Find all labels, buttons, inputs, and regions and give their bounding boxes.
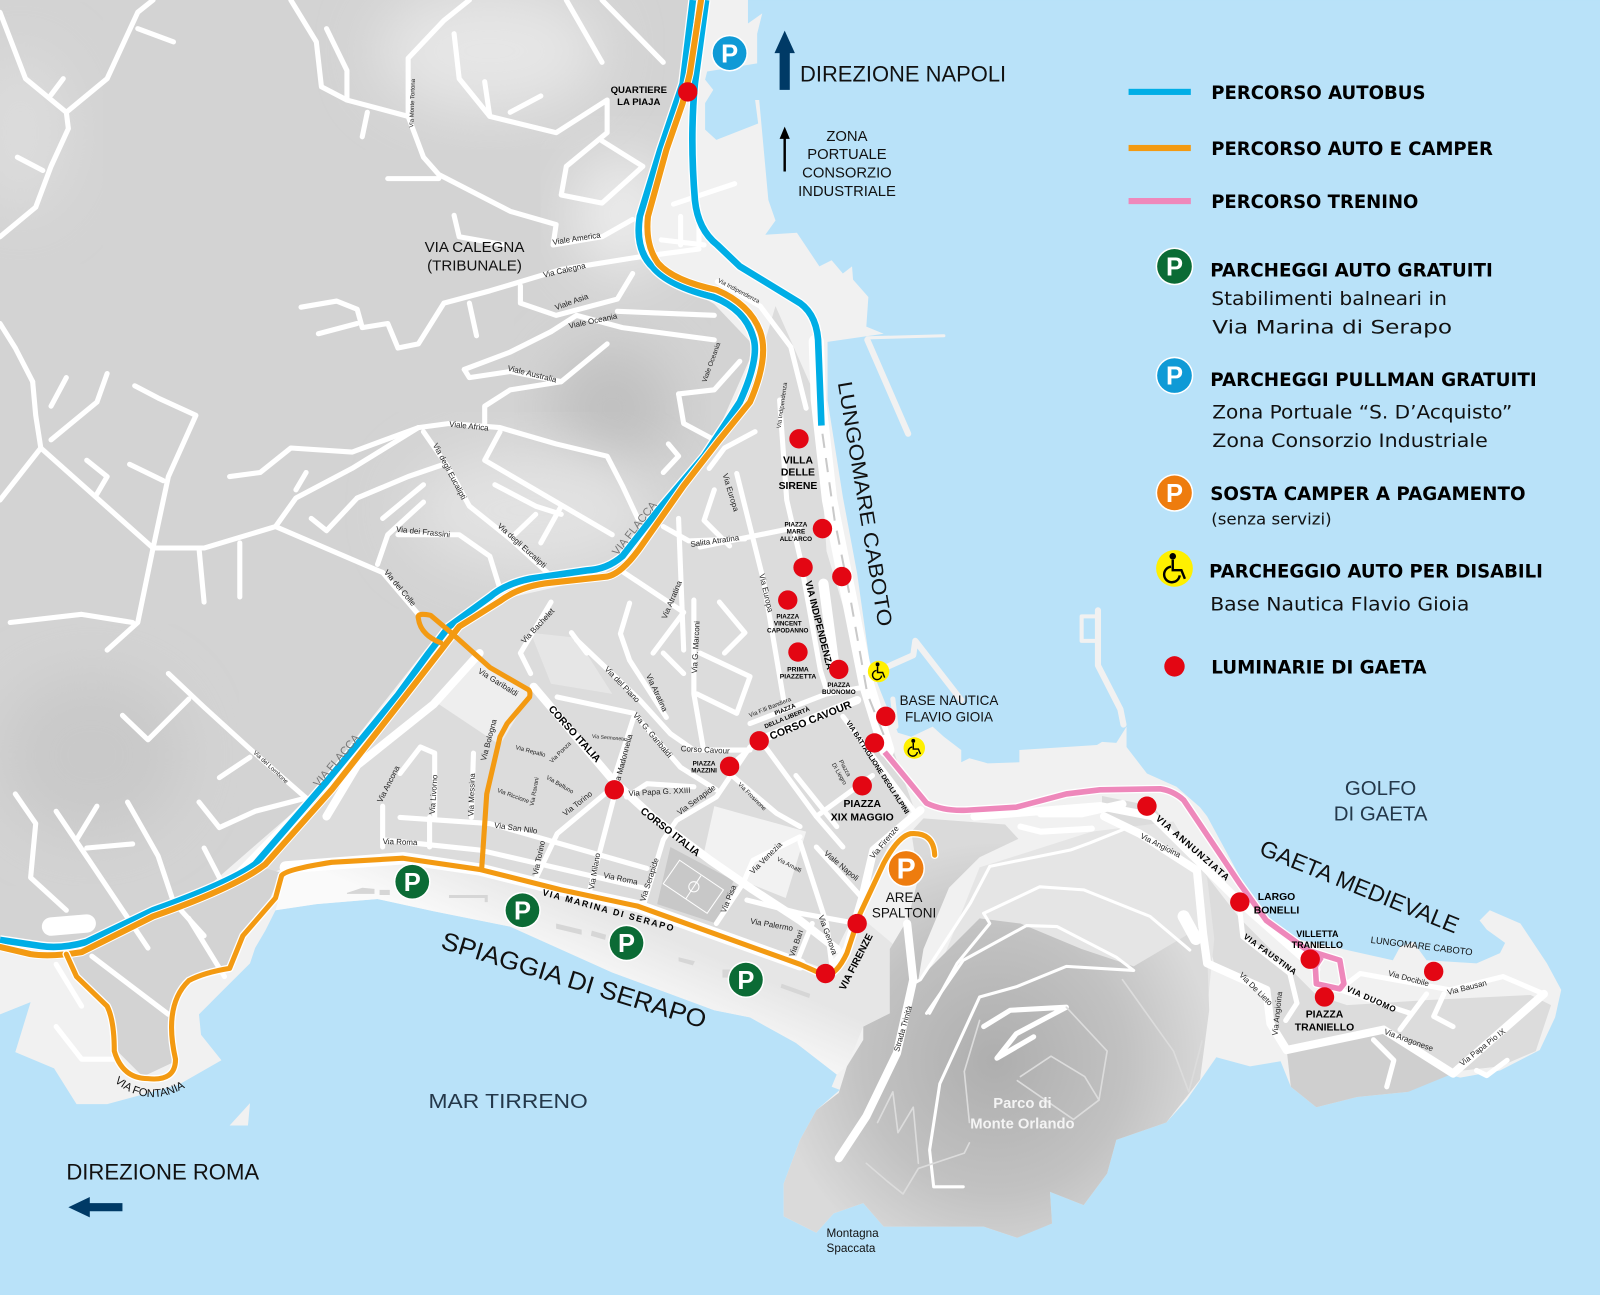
bold place labels: DELLE (781, 468, 815, 479)
medieval quarter blocks (1102, 796, 1551, 1071)
route: auto e camper (0, 0, 935, 1079)
legend: parcheggi auto gratuiti (1156, 248, 1493, 339)
bold place labels: BUONOMO (822, 689, 856, 696)
street name labels: Via Messina (466, 772, 477, 816)
bold place labels: VIA FIRENZE (838, 932, 876, 992)
street name labels: Via Sermoneta (592, 734, 626, 743)
bold place labels: BONELLI (1254, 905, 1299, 916)
street name labels: Viale Oceania (701, 342, 722, 383)
street name labels: Via Madonnella (612, 733, 635, 788)
marker: disabled parking 2 (904, 737, 925, 759)
street name labels: Via Repallo (515, 745, 547, 759)
bold place labels: VIA DUOMO (1345, 984, 1398, 1014)
markers: free car parking (394, 863, 764, 998)
street name labels: Via del Colle (382, 568, 418, 608)
street name labels: Via Bologna (479, 718, 499, 762)
street name labels: Via Livorno (428, 774, 439, 814)
bold place labels: VIA INDIPENDENZA (802, 580, 835, 671)
label: direzione Roma: DIREZIONE ROMA (66, 1160, 259, 1185)
label: golfo di Gaeta (1334, 778, 1428, 825)
direction arrow: Napoli (774, 31, 795, 90)
bold place labels: PIAZZETTA (780, 674, 816, 681)
label: zona portuale: ZONA (826, 129, 868, 145)
arrow: zona portuale (780, 127, 790, 171)
legend: parcheggi pullman gratuiti: Zona Portuale “S. D’Acquisto” (1212, 402, 1512, 423)
street name labels: Via del Piano (603, 665, 642, 705)
legend: parcheggi pullman gratuiti: Zona Consorzio Industriale (1212, 431, 1488, 452)
street name labels: Salita Atratina (690, 533, 740, 549)
legend: parcheggio disabili: PARCHEGGIO AUTO PER DISABILI (1209, 562, 1543, 583)
bold place labels: LARGO (1258, 892, 1295, 903)
label: base nautica: BASE NAUTICA (900, 693, 998, 708)
street name labels: Corso Cavour (681, 744, 730, 756)
label: zona portuale: PORTUALE (807, 147, 887, 163)
markers: free car parking: P (514, 897, 531, 925)
marker: bus parking: P (721, 40, 738, 68)
hill shading: northern hills (0, 0, 755, 944)
bold place labels: CORSO CAVOUR (768, 699, 854, 743)
legend: parcheggi pullman gratuiti (1156, 357, 1537, 452)
street name labels: Via San Nilo (494, 821, 539, 836)
street name labels: Via G. Marconi (690, 621, 702, 674)
street name labels: Via G. Garibaldi (631, 711, 674, 760)
bold place labels: VIA BATTAGLIONE DEGLI ALPINI (844, 720, 910, 816)
bold place labels: CORSO ITALIA (546, 704, 603, 765)
bold place labels: TRANIELLO (1295, 1023, 1354, 1034)
bold place labels: VILLETTA (1296, 929, 1339, 939)
legend: percorso autobus: PERCORSO AUTOBUS (1211, 83, 1426, 104)
label: Montagna Spaccata: Spaccata (827, 1242, 876, 1255)
hill shading highlights (0, 0, 673, 837)
bold place labels: VIA ANNUNZIATA (1154, 813, 1231, 883)
street name labels: Viale America (552, 230, 602, 247)
label: lungomare Caboto: LUNGOMARE CABOTO (833, 380, 895, 628)
route: trenino (885, 752, 1344, 989)
street name labels: Via Atratina (644, 673, 670, 714)
bold place labels: XIX MAGGIO (831, 812, 894, 823)
street name labels: Via Roma (603, 871, 639, 887)
legend: parcheggi pullman gratuiti: PARCHEGGI PULLMAN GRATUITI (1210, 370, 1537, 391)
bold place labels: QUARTIERE (611, 85, 668, 96)
label: direzione Napoli: DIREZIONE NAPOLI (800, 62, 1006, 87)
street name labels: Via Papa G. XXIII (628, 786, 691, 798)
legend: parcheggi pullman gratuiti: P (1166, 363, 1183, 391)
lungomare dashes (822, 434, 886, 740)
street name labels: VIA FLACCA (311, 732, 363, 790)
label: area Spaltoni: AREA (886, 890, 922, 905)
street name labels: Via Europa (721, 472, 741, 513)
street name labels: LUNGOMARE CABOTO (1370, 935, 1473, 957)
street name labels: Via Torino (561, 789, 595, 818)
beach establishments (347, 888, 810, 998)
label: parco di Monte Orlando: Monte Orlando (970, 1117, 1075, 1133)
bold place labels: VILLA (783, 455, 813, 466)
street name labels: Via Docibile (1387, 969, 1430, 988)
bold place labels: PIAZZA (843, 799, 881, 810)
light town zones (439, 633, 806, 898)
arrow: Roma (68, 1197, 122, 1217)
bold place labels: CAPODANNO (767, 628, 809, 635)
label: Montagna Spaccata (827, 1227, 879, 1255)
main roads (51, 342, 1544, 1158)
street name labels: Via Bausan (1446, 978, 1488, 997)
bold place labels: PIAZZA (827, 682, 851, 689)
street name labels: Via Garibaldi (476, 667, 520, 698)
bold place labels: VIA MARINA DI SERAPO (541, 887, 675, 933)
street name labels: Via Indipendenza (777, 381, 789, 429)
street name labels: Via Pisa (719, 883, 738, 914)
label: golfo di Gaeta: DI GAETA (1334, 803, 1428, 825)
markers: free car parking: P (737, 967, 754, 995)
legend: percorso auto e camper: PERCORSO AUTO E CAMPER (1211, 139, 1493, 160)
bold place labels: DELLA LIBERTÀ (763, 706, 811, 730)
label: parco di Monte Orlando: Parco di (993, 1096, 1052, 1112)
street name labels: Via Europa (757, 573, 775, 614)
legend: sosta camper (1156, 474, 1526, 529)
street name labels: Via Bari (787, 929, 805, 958)
legend (1129, 83, 1543, 679)
street name labels: VIA FLACCA (610, 499, 660, 558)
street name labels: Via Angioina (1139, 832, 1183, 860)
street name labels: Via degli Eucalipti (431, 442, 468, 501)
street name labels: Via Aragonese (1383, 1027, 1435, 1053)
bold place labels: ALL'ARCO (780, 536, 812, 543)
marker: disabled parking 1 (868, 661, 889, 682)
street name labels: Via Genova (816, 914, 839, 956)
street name labels: Piazza (837, 759, 852, 778)
street name labels: Via Ponza (549, 741, 573, 765)
label: via Calegna: (TRIBUNALE) (427, 257, 522, 274)
bold place labels: PRIMA (787, 666, 809, 673)
football pitch block (657, 847, 734, 924)
legend: parcheggio disabili: Base Nautica Flavio Gioia (1210, 594, 1469, 615)
street name labels: Via degli Eucalipti (496, 521, 548, 570)
street name labels: Via De Lieto (1237, 971, 1275, 1008)
legend: parcheggio disabili (1156, 550, 1543, 615)
bold place labels: PIAZZA (776, 613, 800, 620)
marker: camper parking (887, 850, 925, 887)
legend: parcheggi auto gratuiti: Via Marina di Serapo (1212, 318, 1452, 339)
street name labels: Via Papa Pio IX (1458, 1026, 1508, 1068)
bold place labels (541, 85, 1398, 1034)
street name labels: Via Torino (531, 839, 547, 876)
street name labels: Viale Oceania (568, 311, 619, 331)
street name labels: Viale Africa (449, 420, 490, 433)
street name labels: Via Angioina (1271, 991, 1284, 1036)
bold place labels: PIAZZA (1306, 1009, 1344, 1020)
bold place labels: VIA FAUSTINA (1242, 932, 1298, 977)
legend: luminarie: LUMINARIE DI GAETA (1211, 658, 1427, 679)
legend: sosta camper: (senza servizi) (1211, 510, 1332, 529)
street name labels: Via Ravani (530, 777, 541, 807)
markers: free car parking: P (618, 930, 635, 958)
upper slope of Monte Orlando (939, 821, 1214, 1080)
bold place labels: LA PIAJA (617, 97, 660, 108)
label: via Calegna: VIA CALEGNA (425, 239, 525, 256)
street name labels: Via Indipendenza (716, 278, 761, 306)
label: zona portuale: CONSORZIO (802, 166, 892, 182)
Monte Orlando (784, 818, 1209, 1238)
bold place labels: MARE (787, 529, 805, 536)
label: base nautica: FLAVIO GIOIA (905, 709, 993, 724)
street name labels: Via Calegna (542, 261, 587, 280)
route: autobus (0, 0, 821, 947)
label: golfo di Gaeta: GOLFO (1345, 778, 1416, 800)
street name labels: Via Ancona (375, 764, 402, 804)
markers: luminarie (605, 82, 1443, 1007)
street name labels: Via Firenze (868, 824, 901, 861)
street name labels: Via F.lli Bandiera (749, 697, 793, 719)
street name labels: Via Milano (587, 852, 602, 890)
street name labels: Viale Napoli (822, 849, 860, 883)
legend: sosta camper: P (1166, 480, 1183, 508)
street name labels: Via Frosinone (736, 782, 767, 813)
label: base nautica (900, 693, 998, 724)
bold place labels: PIAZZA (785, 522, 808, 529)
street name labels: Di Liegro (830, 762, 847, 787)
bold place labels: CORSO ITALIA (638, 806, 702, 860)
bold place labels: SIRENE (779, 481, 817, 492)
marker: bus parking (711, 35, 748, 71)
hill roads (913, 827, 1190, 1187)
markers: free car parking: P (404, 869, 421, 897)
town blocks (235, 306, 913, 969)
street name labels: Strada Trinità (892, 1004, 914, 1053)
marker: camper parking: P (897, 854, 916, 886)
label: parco di Monte Orlando (970, 1096, 1075, 1133)
legend: parcheggi auto gratuiti: P (1166, 254, 1183, 282)
bold place labels: MAZZINI (691, 768, 717, 775)
street name labels: Via Bachelet (519, 606, 557, 645)
street name labels: Viale Asia (554, 292, 590, 312)
label: spiaggia di Serapo: SPIAGGIA DI SERAPO (438, 927, 710, 1034)
street name labels: Via Monte Tortona (409, 78, 417, 128)
street name labels: Via Atratina (660, 579, 684, 620)
street name labels: Via Belluno (545, 775, 575, 796)
street name labels: Via dei Frassini (396, 525, 451, 539)
bold place labels: PIAZZA (693, 760, 716, 767)
label: via Fontania: VIA FONTANIA (116, 1076, 186, 1098)
footpaths on Monte Orlando (866, 980, 1202, 1194)
label: zona portuale (798, 129, 896, 200)
legend: percorso trenino: PERCORSO TRENINO (1211, 192, 1418, 213)
label: Gaeta medievale: GAETA MEDIEVALE (1256, 835, 1463, 938)
label: Montagna Spaccata: Montagna (827, 1227, 879, 1240)
football pitch (663, 860, 723, 913)
piers and breakwaters (230, 336, 1123, 1126)
bold place labels: PIAZZA (774, 702, 797, 717)
bold place labels: TRANIELLO (1292, 940, 1343, 950)
street name labels: Via Venezia (748, 840, 784, 876)
label: zona portuale: INDUSTRIALE (798, 184, 896, 200)
legend: parcheggi auto gratuiti: PARCHEGGI AUTO GRATUITI (1210, 261, 1493, 282)
legend: sosta camper: SOSTA CAMPER A PAGAMENTO (1210, 484, 1526, 505)
street name labels (252, 78, 1508, 1068)
label: area Spaltoni: SPALTONI (872, 905, 936, 920)
bold place labels: VINCENT (774, 621, 802, 628)
southern medieval slope (1287, 1030, 1453, 1107)
street name labels: Via Serapide (675, 783, 718, 817)
label: area Spaltoni (872, 890, 936, 920)
street name labels: Via Amalfi (776, 857, 802, 875)
label: mar Tirreno: MAR TIRRENO (429, 1091, 588, 1113)
street name labels: Via Palermo (750, 917, 794, 933)
street name labels: Viale Australia (507, 364, 558, 385)
Fontania headland (71, 865, 281, 1077)
street name labels: Via del Lombone (252, 750, 289, 786)
legend: parcheggi auto gratuiti: Stabilimenti balneari in (1211, 289, 1447, 310)
beach strip (276, 859, 893, 1075)
street name labels: Via Riccione (496, 788, 530, 805)
label: via Calegna (425, 239, 525, 274)
street name labels: Via Roma (383, 837, 418, 847)
street name labels: Via Serapide (638, 856, 661, 903)
